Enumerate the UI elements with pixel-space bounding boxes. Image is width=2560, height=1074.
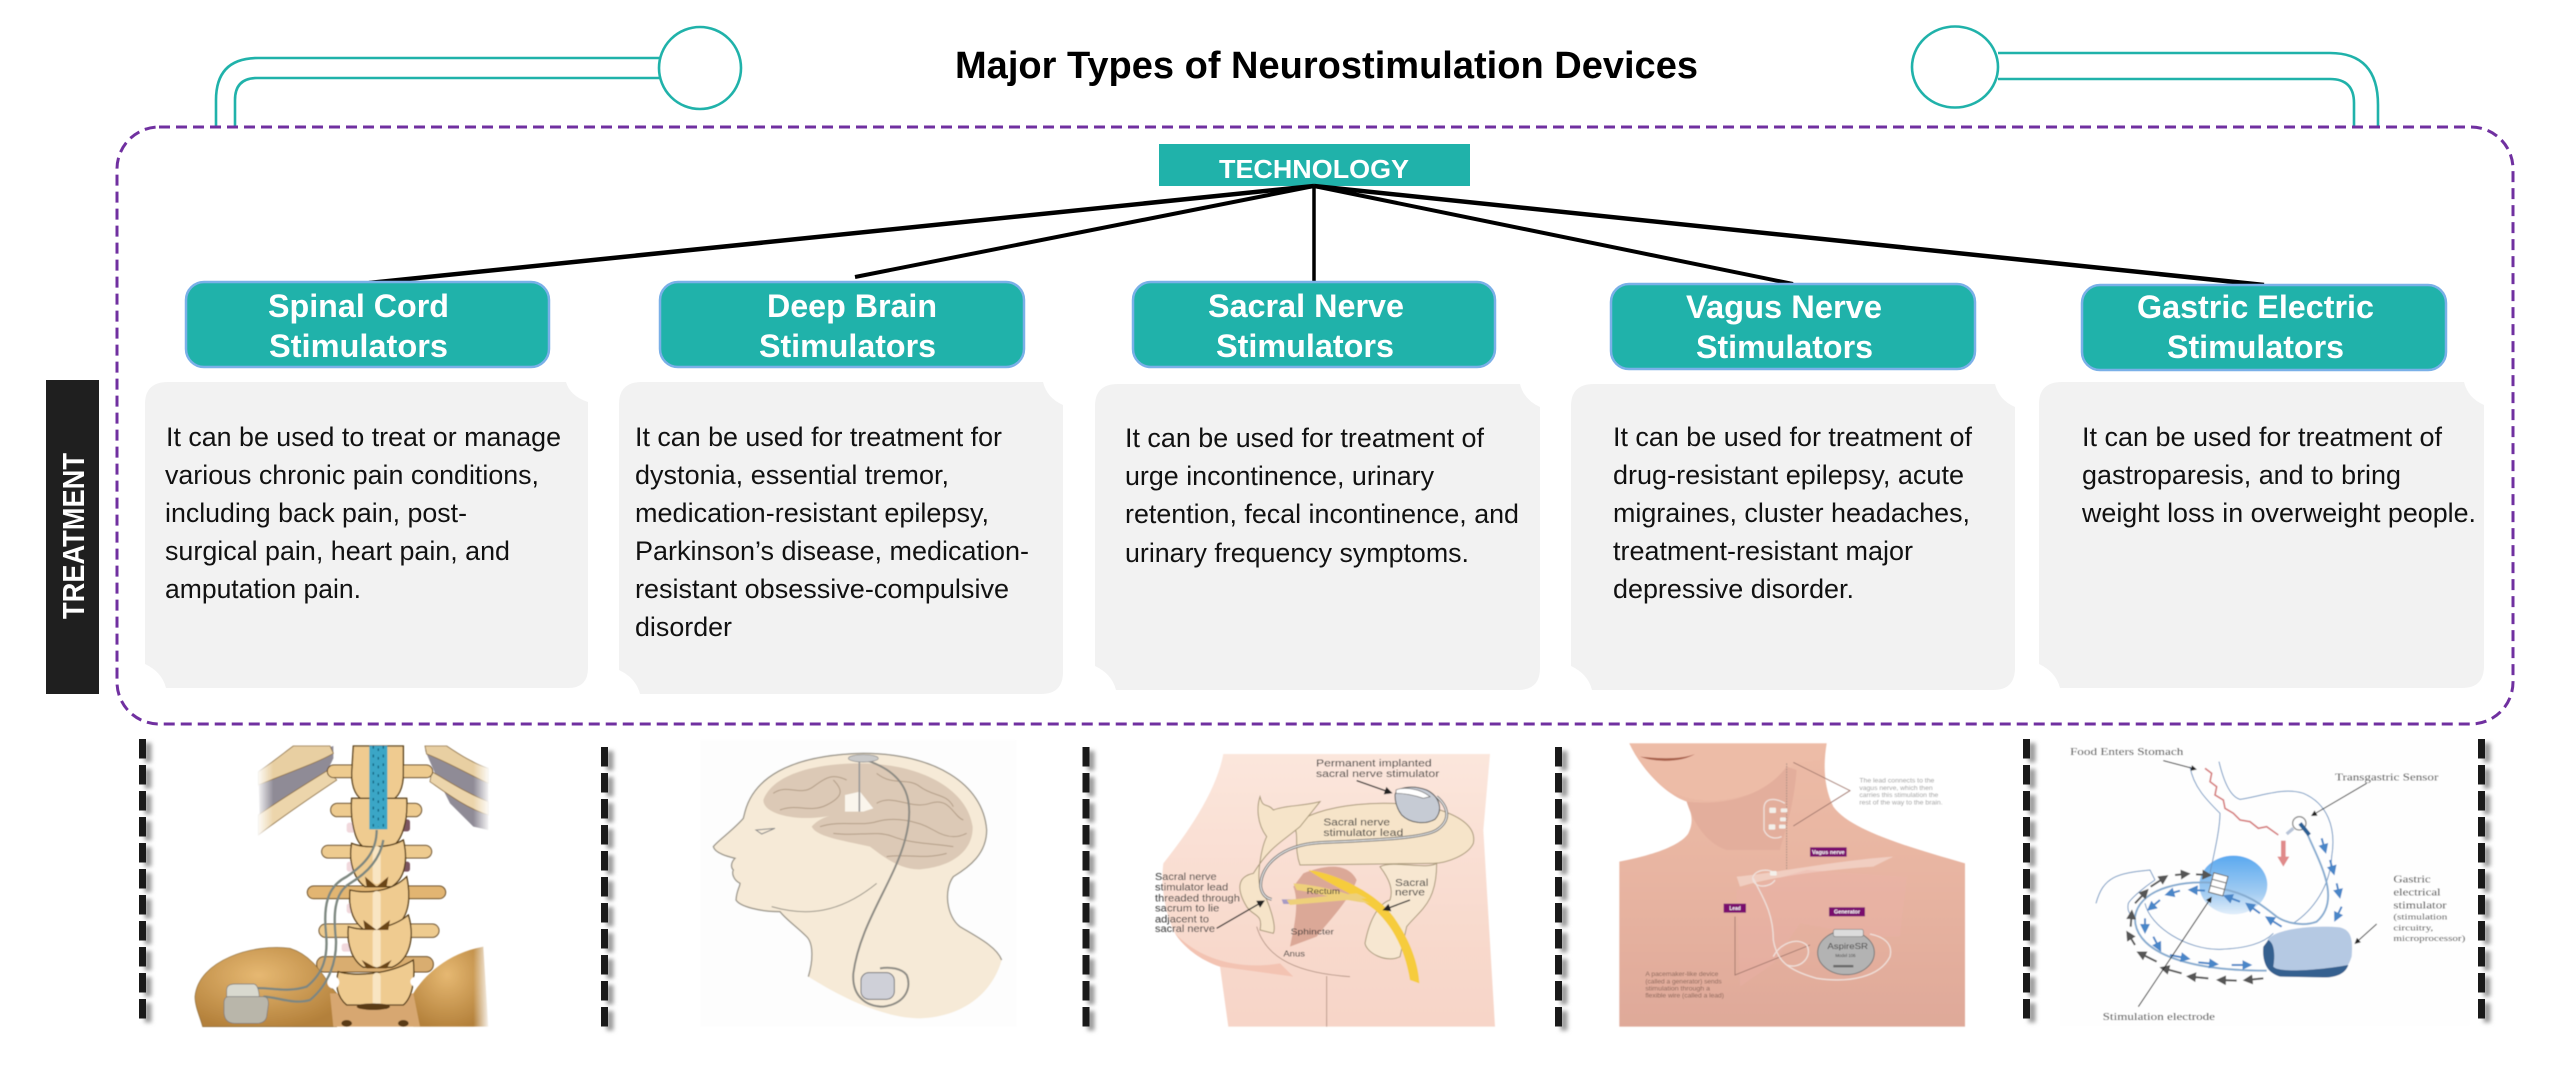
dashed outer panel <box>117 127 2513 724</box>
connector lines from technology to devices <box>369 186 2264 285</box>
device heading: gastric electric: Gastric Electric <box>2137 289 2374 325</box>
illustration: vagus nerve stimulator in chest and neck <box>1619 743 1965 1027</box>
illustration: vagus nerve stimulator in chest and neck: Lead <box>1729 906 1741 912</box>
treatment card: sacral nerve: urinary frequency symptoms. <box>1125 538 1469 568</box>
illustration: vagus nerve stimulator in chest and neck: stimulation through a <box>1645 985 1710 992</box>
device heading: deep brain: Stimulators <box>759 328 936 364</box>
title: Major Types of Neurostimulation Devices <box>955 45 1698 87</box>
device heading: sacral nerve: Stimulators <box>1216 328 1394 364</box>
illustration: sacral nerve stimulator in pelvis cross-section: Sacral <box>1395 878 1428 889</box>
illustration: sacral nerve stimulator in pelvis cross-section: Rectum <box>1307 886 1340 896</box>
illustration: sacral nerve stimulator in pelvis cross-section: Sacral nerve <box>1323 818 1391 829</box>
treatment card: spinal cord: including back pain, post- <box>165 498 467 528</box>
treatment card: sacral nerve: retention, fecal incontinence, and <box>1125 499 1519 529</box>
treatment card: vagus nerve: depressive disorder. <box>1613 574 1854 604</box>
treatment card: sacral nerve: It can be used for treatment of <box>1125 423 1484 453</box>
treatment card: gastric electric: It can be used for treatment of <box>2082 422 2442 452</box>
image column dividers <box>142 739 2487 1031</box>
illustration: sacral nerve stimulator in pelvis cross-section: Sphincter <box>1291 926 1334 936</box>
illustration: spinal cord stimulator implanted on the lumbar spine <box>195 746 490 1028</box>
illustration: sacral nerve stimulator in pelvis cross-section: sacral nerve stimulator <box>1316 769 1440 780</box>
treatment card: deep brain: It can be used for treatment for <box>635 422 1002 452</box>
device heading: vagus nerve: Vagus Nerve <box>1686 289 1882 325</box>
treatment card: sacral nerve: urge incontinence, urinary <box>1125 461 1434 491</box>
illustration: gastric electric stimulator on stomach <box>2060 739 2470 1026</box>
illustration: vagus nerve stimulator in chest and neck: rest of the way to the brain. <box>1859 799 1943 806</box>
device heading: spinal cord: Spinal Cord <box>268 288 449 324</box>
illustration: gastric electric stimulator on stomach: Gastric <box>2393 875 2431 886</box>
illustration: sacral nerve stimulator in pelvis cross-section: stimulator lead <box>1323 828 1403 839</box>
treatment card: vagus nerve <box>1571 384 2015 690</box>
illustration: sacral nerve stimulator in pelvis cross-section: sacral nerve <box>1155 924 1215 935</box>
illustration: vagus nerve stimulator in chest and neck: carries this stimulation the <box>1859 792 1939 799</box>
illustration: vagus nerve stimulator in chest and neck: Generator <box>1834 910 1860 916</box>
treatment card: gastric electric: weight loss in overweight people. <box>2081 498 2476 528</box>
device heading: spinal cord: Stimulators <box>269 328 448 364</box>
treatment card: deep brain: disorder <box>635 612 732 642</box>
illustration: deep brain stimulator in head profile <box>700 740 1017 1027</box>
treatment card: spinal cord: surgical pain, heart pain, and <box>165 536 510 566</box>
illustration: vagus nerve stimulator in chest and neck: (called a generator) sends <box>1645 978 1722 985</box>
illustration: gastric electric stimulator on stomach: (stimulation <box>2393 912 2448 921</box>
illustration: vagus nerve stimulator in chest and neck: AspireSR <box>1827 941 1868 951</box>
technology label <box>1159 144 1470 186</box>
treatment card: deep brain: medication-resistant epilepsy, <box>635 498 989 528</box>
device heading: vagus nerve <box>1611 284 1975 369</box>
device heading: deep brain <box>660 282 1024 367</box>
treatment card: spinal cord: It can be used to treat or manage <box>166 422 561 452</box>
illustration: vagus nerve stimulator in chest and neck: flexible wire (called a lead) <box>1645 993 1724 1000</box>
illustration: vagus nerve stimulator in chest and neck: Model 106 <box>1835 953 1856 958</box>
treatment side label: TREATMENT <box>56 453 91 619</box>
treatment card: deep brain: Parkinson’s disease, medication- <box>635 536 1029 566</box>
illustration: sacral nerve stimulator in pelvis cross-section: Permanent implanted <box>1316 759 1432 770</box>
illustration: gastric electric stimulator on stomach: Food Enters Stomach <box>2070 747 2183 758</box>
treatment card: sacral nerve <box>1095 384 1540 690</box>
illustration: gastric electric stimulator on stomach: stimulator <box>2393 900 2448 911</box>
illustration: vagus nerve stimulator in chest and neck: Vagus nerve <box>1812 850 1845 856</box>
treatment card: deep brain: resistant obsessive-compulsive <box>635 574 1009 604</box>
treatment card: gastric electric: gastroparesis, and to bring <box>2082 460 2401 490</box>
treatment card: deep brain: dystonia, essential tremor, <box>635 460 949 490</box>
treatment card: deep brain <box>619 382 1063 694</box>
treatment card: vagus nerve: drug-resistant epilepsy, acute <box>1613 460 1964 490</box>
treatment card: vagus nerve: It can be used for treatment of <box>1613 422 1972 452</box>
illustration: sacral nerve stimulator in pelvis cross-section: adjacent to <box>1155 914 1209 925</box>
device heading: sacral nerve: Sacral Nerve <box>1208 288 1404 324</box>
device heading: deep brain: Deep Brain <box>767 288 937 324</box>
treatment card: spinal cord <box>145 382 588 688</box>
device heading: gastric electric <box>2082 285 2446 370</box>
illustration: gastric electric stimulator on stomach: microprocessor) <box>2393 934 2466 943</box>
treatment card: vagus nerve: treatment-resistant major <box>1613 536 1913 566</box>
decorative connector: right pipe and circle <box>1912 26 2378 127</box>
illustration: vagus nerve stimulator in chest and neck: The lead connects to the <box>1859 778 1935 785</box>
treatment card: spinal cord: amputation pain. <box>165 574 361 604</box>
illustration: gastric electric stimulator on stomach: Stimulation electrode <box>2103 1012 2216 1023</box>
illustration: sacral nerve stimulator in pelvis cross-section: sacrum to lie <box>1155 904 1220 915</box>
illustration: sacral nerve stimulator in pelvis cross-section: stimulator lead <box>1155 883 1228 894</box>
illustration: vagus nerve stimulator in chest and neck: A pacemaker-like device <box>1645 971 1719 978</box>
illustration: sacral nerve stimulator in pelvis cross-section: threaded through <box>1155 893 1240 904</box>
illustration: vagus nerve stimulator in chest and neck: vagus nerve, which then <box>1859 785 1933 792</box>
illustration: gastric electric stimulator on stomach: circuitry, <box>2393 924 2433 933</box>
treatment card: vagus nerve: migraines, cluster headaches, <box>1613 498 1970 528</box>
device heading: sacral nerve <box>1133 282 1495 367</box>
illustration: gastric electric stimulator on stomach: Transgastric Sensor <box>2335 773 2439 784</box>
illustration: sacral nerve stimulator in pelvis cross-section: Sacral nerve <box>1155 872 1217 883</box>
treatment card: spinal cord: various chronic pain conditions, <box>165 460 539 490</box>
device heading: spinal cord <box>186 282 549 367</box>
illustration: sacral nerve stimulator in pelvis cross-section: nerve <box>1395 888 1426 899</box>
device heading: vagus nerve: Stimulators <box>1696 329 1873 365</box>
treatment card: gastric electric <box>2039 382 2484 688</box>
treatment side label <box>46 380 99 694</box>
illustration: sacral nerve stimulator in pelvis cross-section <box>1155 754 1495 1027</box>
illustration: sacral nerve stimulator in pelvis cross-section: Anus <box>1283 949 1306 959</box>
illustration: gastric electric stimulator on stomach: electrical <box>2393 888 2441 899</box>
technology label: TECHNOLOGY <box>1219 154 1409 184</box>
decorative connector: left pipe and circle <box>216 27 741 127</box>
device heading: gastric electric: Stimulators <box>2167 329 2344 365</box>
